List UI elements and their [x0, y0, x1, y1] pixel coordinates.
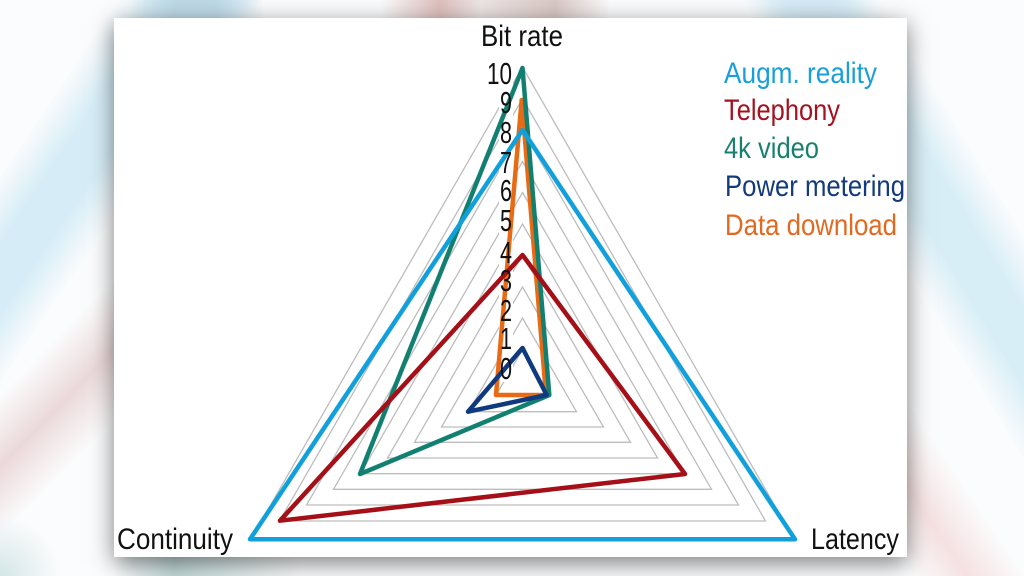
- legend item: 4k video: 4k video: [724, 132, 819, 165]
- series: power metering: [468, 348, 547, 412]
- series: telephony: [280, 255, 685, 521]
- legend item: augmented reality: Augm. reality: [724, 57, 877, 90]
- legend item: telephony: Telephony: [724, 94, 840, 127]
- axis label: latency: Latency: [811, 523, 899, 556]
- axis scale labels 0 to 10: 0: [500, 351, 512, 386]
- axis scale labels 0 to 10: 5: [500, 203, 512, 238]
- axis scale labels 0 to 10: 10: [487, 56, 512, 91]
- axis scale labels 0 to 10: 9: [500, 85, 512, 120]
- axis scale labels 0 to 10: 1: [500, 321, 512, 356]
- panel: radar chart card: [114, 18, 906, 557]
- axis scale labels 0 to 10: 7: [500, 145, 512, 180]
- axis scale labels 0 to 10: 3: [500, 263, 512, 298]
- series: data download: [496, 100, 546, 395]
- legend item: data download: Data download: [725, 209, 897, 242]
- series: augmented reality: [250, 130, 795, 539]
- axis scale labels 0 to 10: 2: [500, 293, 512, 328]
- series: 4k video: [360, 68, 549, 474]
- axis scale labels 0 to 10: 4: [500, 235, 512, 270]
- axis scale labels 0 to 10: 8: [500, 115, 512, 150]
- axis label: continuity: Continuity: [117, 523, 233, 556]
- legend item: power metering: Power metering: [725, 170, 905, 203]
- axis scale labels 0 to 10: 6: [500, 173, 512, 208]
- axis scale labels 0 to 10: [487, 56, 512, 386]
- axis label: bit rate: Bit rate: [481, 20, 563, 53]
- legend: [724, 57, 905, 242]
